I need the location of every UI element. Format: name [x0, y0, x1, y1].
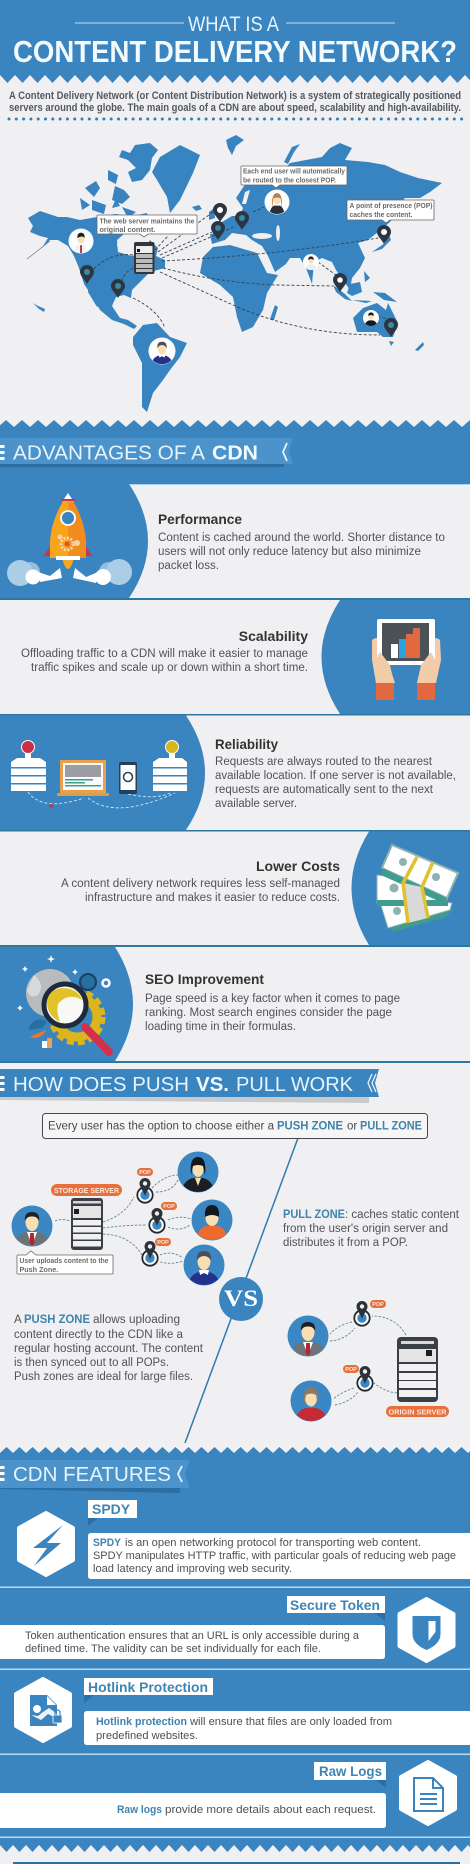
- text: push zone: is then synced out to all POPs.: [14, 1357, 169, 1369]
- callout: end user: [241, 166, 347, 188]
- icon: money: [377, 845, 458, 932]
- japan: [372, 232, 391, 252]
- label: Raw Logs: [319, 1763, 382, 1779]
- pop labels: POP: [163, 1204, 175, 1210]
- map pins: [80, 203, 398, 337]
- label: SPDY: [92, 1501, 131, 1517]
- baja: [88, 285, 99, 307]
- dashed arrows: [330, 1316, 406, 1405]
- user: uploader: [12, 1206, 52, 1247]
- pop node 3: [142, 1241, 158, 1266]
- description: will ensure that files are only loaded from: [189, 1716, 392, 1728]
- callout: uploads: User uploads content to the: [20, 1256, 108, 1265]
- user: lady: [178, 1152, 218, 1193]
- arctic islands: [119, 143, 158, 182]
- callout: web server: [97, 215, 197, 237]
- label: Hotlink Protection: [88, 1679, 208, 1695]
- text: pull zone: [283, 1209, 460, 1249]
- description: SPDY manipulates HTTP traffic, with particular goals of reducing web page: [93, 1550, 456, 1562]
- callout: uploads: [17, 1251, 113, 1274]
- panel: lower costs: [0, 832, 470, 947]
- push vs pull banner: HOW DOES PUSH: [13, 1074, 189, 1096]
- text: performance: users will not only reduce latency but also minimize: [158, 546, 421, 558]
- dotted divider: [9, 118, 462, 120]
- icon: document hexagon: [401, 1762, 455, 1824]
- text: performance: Content is cached around the world. Shorter distance to: [158, 532, 445, 544]
- label: origin server: ORIGIN SERVER: [388, 1410, 446, 1416]
- text: push zone: PUSH ZONE: [24, 1314, 90, 1326]
- australia: [353, 303, 398, 337]
- dashed network routes: [93, 207, 391, 335]
- user: orange: [192, 1200, 232, 1241]
- option box: or: [347, 1120, 357, 1132]
- label: [84, 1678, 213, 1703]
- description: Token authentication ensures that an URL is only accessible during a: [25, 1630, 359, 1642]
- icon: servers and devices: [11, 740, 187, 808]
- alaska chain: [27, 241, 50, 259]
- description: predefined websites.: [96, 1730, 198, 1742]
- features banner: CDN FEATURES: [13, 1464, 171, 1486]
- text: pull zone: distributes it from a POP.: [283, 1237, 408, 1249]
- heading: reliability: Reliability: [215, 736, 278, 752]
- pull zone diagram: [288, 1300, 449, 1422]
- text: reliability: Requests are always routed to the nearest: [215, 756, 433, 768]
- description: load latency and improving web security.: [93, 1563, 292, 1575]
- pop node 2: [149, 1208, 165, 1233]
- greenland: [152, 145, 200, 213]
- description: [0, 1625, 385, 1659]
- feature: hotlink protection: [16, 1678, 470, 1745]
- push zone diagram: [12, 1152, 232, 1286]
- label: [314, 1762, 386, 1788]
- feature: spdy: [19, 1500, 470, 1579]
- text: scalability: traffic spikes and scale up or down within a short time.: [31, 662, 308, 674]
- callout: point of presence: caches the content.: [350, 210, 412, 219]
- pop labels: [137, 1168, 177, 1246]
- push vs pull banner: [0, 1069, 379, 1103]
- description: [0, 1793, 386, 1828]
- description: SPDY: [93, 1537, 122, 1549]
- panel: scalability: [0, 600, 470, 716]
- eurasia: [210, 143, 442, 290]
- intro text: [9, 90, 461, 114]
- text: performance: packet loss.: [158, 560, 219, 572]
- user: man: [288, 1316, 328, 1357]
- label: origin server: [386, 1406, 449, 1417]
- text: scalability: [21, 648, 308, 674]
- pop labels: POP: [372, 1302, 384, 1308]
- vs badge: VS: [224, 1286, 258, 1311]
- text: pull zone: from the user's origin server and: [283, 1223, 448, 1235]
- text: reliability: available server.: [215, 798, 297, 810]
- feature: raw logs: [0, 1762, 455, 1828]
- callout: web server: The web server maintains the: [100, 216, 194, 226]
- map users: [68, 190, 379, 365]
- text: push zone: allows uploading: [93, 1314, 180, 1326]
- text: seo improvement: loading time in their formulas.: [145, 1021, 296, 1033]
- africa: [200, 245, 278, 332]
- description: defined time. The validity can be set individually for each file.: [25, 1643, 321, 1655]
- text: push zone: [14, 1314, 204, 1383]
- label: Secure Token: [290, 1597, 380, 1613]
- option box: Every user has the option to choose either a: [48, 1120, 275, 1132]
- iceland uk svalbard: [192, 135, 244, 220]
- storage server: [71, 1198, 103, 1250]
- text: scalability: Offloading traffic to a CDN will make it easier to manage: [21, 648, 308, 660]
- callout: point of presence: [347, 200, 434, 223]
- text: reliability: [215, 756, 456, 810]
- panel: performance: [0, 484, 470, 600]
- icon: lightning hexagon: [19, 1513, 73, 1575]
- pop labels: POP: [345, 1367, 357, 1373]
- text: push zone: regular hosting account. The content: [14, 1343, 204, 1355]
- panel: seo improvement: [0, 947, 470, 1063]
- icon: tablet chart: [372, 619, 441, 700]
- user: girl: [290, 1380, 332, 1422]
- dashed arrows: [55, 1175, 191, 1263]
- push vs pull banner: PULL WORK: [236, 1074, 354, 1096]
- map server: [134, 242, 154, 274]
- text: seo improvement: [145, 993, 400, 1033]
- novaya zemlya: [284, 144, 300, 164]
- icon: seo magnifier: [17, 955, 110, 1052]
- text: push zone: Push zones are ideal for large files.: [14, 1371, 193, 1383]
- advantages banner: ADVANTAGES OF A: [13, 442, 206, 464]
- callout: end user: be routed to the closest POP.: [243, 176, 336, 184]
- feature: secure token: [0, 1596, 454, 1661]
- features background: [0, 1447, 470, 1864]
- description: provide more details about each request.: [165, 1804, 376, 1816]
- features banner: [0, 1460, 190, 1493]
- description: Raw logs: [117, 1804, 162, 1816]
- tasmania nz hawaii: [33, 303, 424, 351]
- heading: seo improvement: SEO Improvement: [145, 971, 264, 987]
- text: performance: [158, 532, 445, 572]
- panel: reliability: [0, 716, 470, 832]
- title line 1: WHAT IS A: [188, 13, 279, 36]
- text: seo improvement: ranking. Most search engines consider the page: [145, 1007, 392, 1019]
- diagonal divider: [185, 1138, 298, 1443]
- text: reliability: available location. If one server is not available,: [215, 770, 456, 782]
- advantages banner: CDN: [212, 442, 258, 464]
- pop labels: [343, 1300, 386, 1373]
- south america: [133, 323, 187, 412]
- text: lower costs: infrastructure and makes it easier to reduce costs.: [85, 892, 340, 904]
- north america: [28, 211, 165, 329]
- option box: PUSH ZONE: [277, 1120, 343, 1132]
- label: storage server: STORAGE SERVER: [54, 1186, 120, 1195]
- vs badge: [219, 1277, 263, 1321]
- label: [287, 1596, 385, 1621]
- description: [88, 1533, 470, 1579]
- icon: rocket: [7, 493, 132, 586]
- callout: point of presence: A point of presence (POP): [350, 201, 433, 210]
- description: [84, 1711, 470, 1745]
- icon: image lock hexagon: [16, 1679, 70, 1741]
- text: pull zone: PULL ZONE: [283, 1209, 345, 1221]
- description: is an open networking protocol for transporting web content.: [125, 1537, 421, 1549]
- pop nodes: [137, 1178, 153, 1203]
- text: reliability: requests are automatically sent to the next: [215, 784, 434, 796]
- text: pull zone: : caches static content: [345, 1209, 460, 1221]
- madagascar: [270, 305, 278, 320]
- text: seo improvement: Page speed is a key factor when it comes to page: [145, 993, 400, 1005]
- heading: scalability: Scalability: [239, 628, 308, 644]
- callout: end user: Each end user will automatically: [243, 166, 345, 176]
- text: push zone: content directly to the CDN like a: [14, 1329, 184, 1341]
- pop labels: POP: [139, 1170, 151, 1176]
- origin server: [397, 1337, 438, 1402]
- option box: [42, 1114, 428, 1138]
- option box: PULL ZONE: [360, 1120, 422, 1132]
- world map: [27, 135, 442, 412]
- heading: performance: Performance: [158, 511, 242, 527]
- text: lower costs: [61, 878, 340, 904]
- icon: shield hexagon: [400, 1599, 454, 1661]
- advantages banner: [0, 420, 470, 484]
- callout: web server: original content.: [100, 225, 155, 234]
- text: push zone: A: [14, 1314, 22, 1326]
- description: Hotlink protection: [96, 1716, 187, 1728]
- pop node 2: [357, 1366, 373, 1391]
- inland seas: [113, 190, 280, 312]
- push vs pull banner: VS.: [196, 1074, 229, 1096]
- pop node: [354, 1301, 370, 1326]
- text: lower costs: A content delivery network requires less self-managed: [61, 878, 340, 890]
- heading: lower costs: Lower Costs: [256, 858, 340, 874]
- title header: [0, 0, 470, 83]
- pop labels: POP: [157, 1240, 169, 1246]
- callout: uploads: Push Zone.: [20, 1265, 58, 1274]
- label: [88, 1500, 137, 1526]
- user: navy: [184, 1244, 224, 1286]
- se asia islands: [333, 271, 397, 303]
